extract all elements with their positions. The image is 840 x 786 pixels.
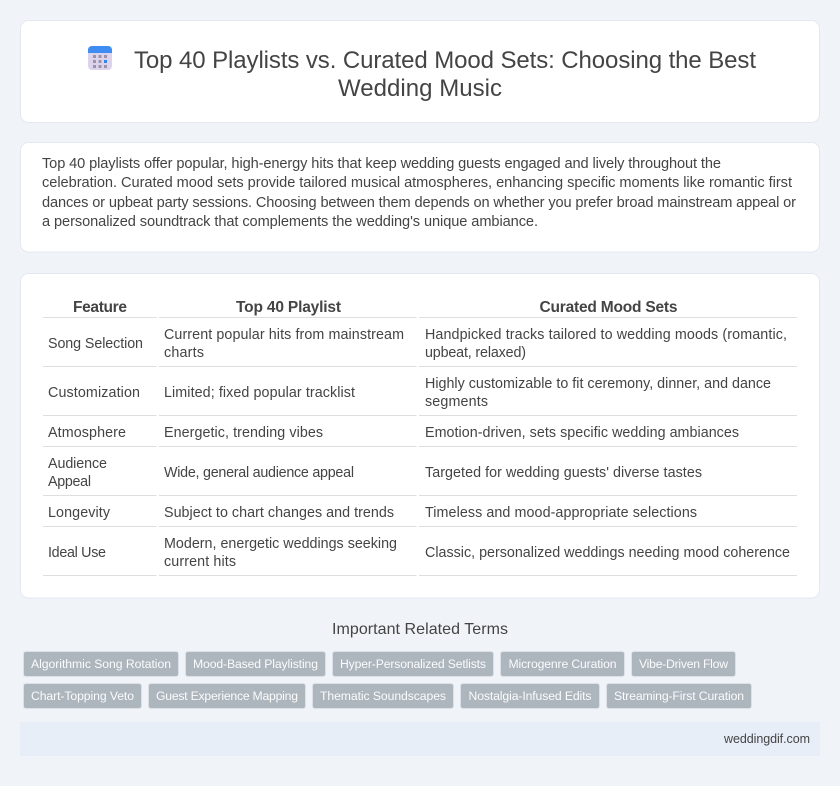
row: longevity bbox=[48, 505, 697, 521]
panel: intro text: a personalized soundtrack that complements the wedding's unique ambiance. bbox=[42, 214, 538, 230]
row: song selection: charts bbox=[164, 345, 204, 361]
tags: related terms bbox=[24, 652, 752, 708]
row: song selection bbox=[48, 327, 787, 361]
footer bar bbox=[20, 722, 820, 756]
row: customization: Customization bbox=[48, 385, 140, 401]
row: song selection: Song Selection bbox=[48, 336, 143, 352]
panel: intro text bbox=[20, 142, 820, 252]
table header: Top 40 Playlist bbox=[236, 299, 341, 316]
row: ideal use: Ideal Use bbox=[48, 545, 106, 561]
row: ideal use: Modern, energetic weddings seeking bbox=[164, 536, 397, 552]
row: audience appeal: Appeal bbox=[48, 474, 91, 490]
row: audience appeal bbox=[48, 456, 702, 490]
icon: calendar bbox=[88, 46, 112, 70]
tags: related terms: Nostalgia-Infused Edits bbox=[468, 689, 592, 703]
row: customization: Limited; fixed popular tracklist bbox=[164, 385, 355, 401]
row: customization bbox=[48, 376, 771, 410]
table header bbox=[73, 299, 678, 316]
heading: related terms: Important Related Terms bbox=[332, 621, 508, 638]
title: Wedding Music bbox=[338, 75, 502, 102]
row: atmosphere bbox=[48, 425, 739, 441]
table header: Curated Mood Sets bbox=[540, 299, 678, 316]
tags: related terms: Chart-Topping Veto bbox=[31, 689, 134, 703]
row: longevity: Longevity bbox=[48, 505, 111, 521]
tags: related terms: Microgenre Curation bbox=[508, 657, 616, 671]
row: song selection: Handpicked tracks tailored to wedding moods (romantic, bbox=[425, 327, 787, 343]
panel: intro text: celebration. Curated mood sets provide tailored musical atmospheres, enhancing specific moments like romantic first bbox=[42, 175, 792, 191]
tags: related terms: Mood-Based Playlisting bbox=[193, 657, 318, 671]
tags: related terms: Guest Experience Mapping bbox=[156, 689, 298, 703]
row: customization: Highly customizable to fit ceremony, dinner, and dance bbox=[425, 376, 771, 392]
footer bar: weddingdif.com bbox=[723, 732, 810, 746]
tags: related terms: Streaming-First Curation bbox=[614, 689, 744, 703]
row: audience appeal: Audience bbox=[48, 456, 107, 472]
row: customization: segments bbox=[425, 394, 488, 410]
row: audience appeal: Wide, general audience appeal bbox=[164, 465, 354, 481]
row: longevity: Timeless and mood-appropriate selections bbox=[425, 505, 697, 521]
row: ideal use: current hits bbox=[164, 554, 236, 570]
panel: comparison table bbox=[20, 274, 820, 598]
row: song selection: Current popular hits from mainstream bbox=[164, 327, 404, 343]
title: Top 40 Playlists vs. Curated Mood Sets: Choosing the Best bbox=[134, 47, 756, 74]
row: atmosphere: Energetic, trending vibes bbox=[164, 425, 323, 441]
tags: related terms: Vibe-Driven Flow bbox=[639, 657, 728, 671]
panel: header bbox=[20, 20, 820, 122]
row: audience appeal: Targeted for wedding guests' diverse tastes bbox=[425, 465, 702, 481]
panel: intro text: dances or upbeat party sessions. Choosing between them depends on whether you prefer broad mainstream appeal or bbox=[42, 195, 796, 211]
row: ideal use: Classic, personalized weddings needing mood coherence bbox=[425, 545, 790, 561]
title bbox=[134, 47, 756, 102]
panel: intro text: Top 40 playlists offer popular, high-energy hits that keep wedding guests engaged and lively throughout the bbox=[42, 156, 721, 172]
row: longevity: Subject to chart changes and trends bbox=[164, 505, 394, 521]
row: atmosphere: Emotion-driven, sets specific wedding ambiances bbox=[425, 425, 739, 441]
tags: related terms: Algorithmic Song Rotation bbox=[31, 657, 171, 671]
row: atmosphere: Atmosphere bbox=[48, 425, 126, 441]
tags: related terms: Hyper-Personalized Setlists bbox=[340, 657, 486, 671]
row: song selection: upbeat, relaxed) bbox=[425, 345, 526, 361]
row: ideal use bbox=[48, 536, 790, 570]
tags: related terms: Thematic Soundscapes bbox=[320, 689, 446, 703]
table header: Feature bbox=[73, 299, 127, 316]
